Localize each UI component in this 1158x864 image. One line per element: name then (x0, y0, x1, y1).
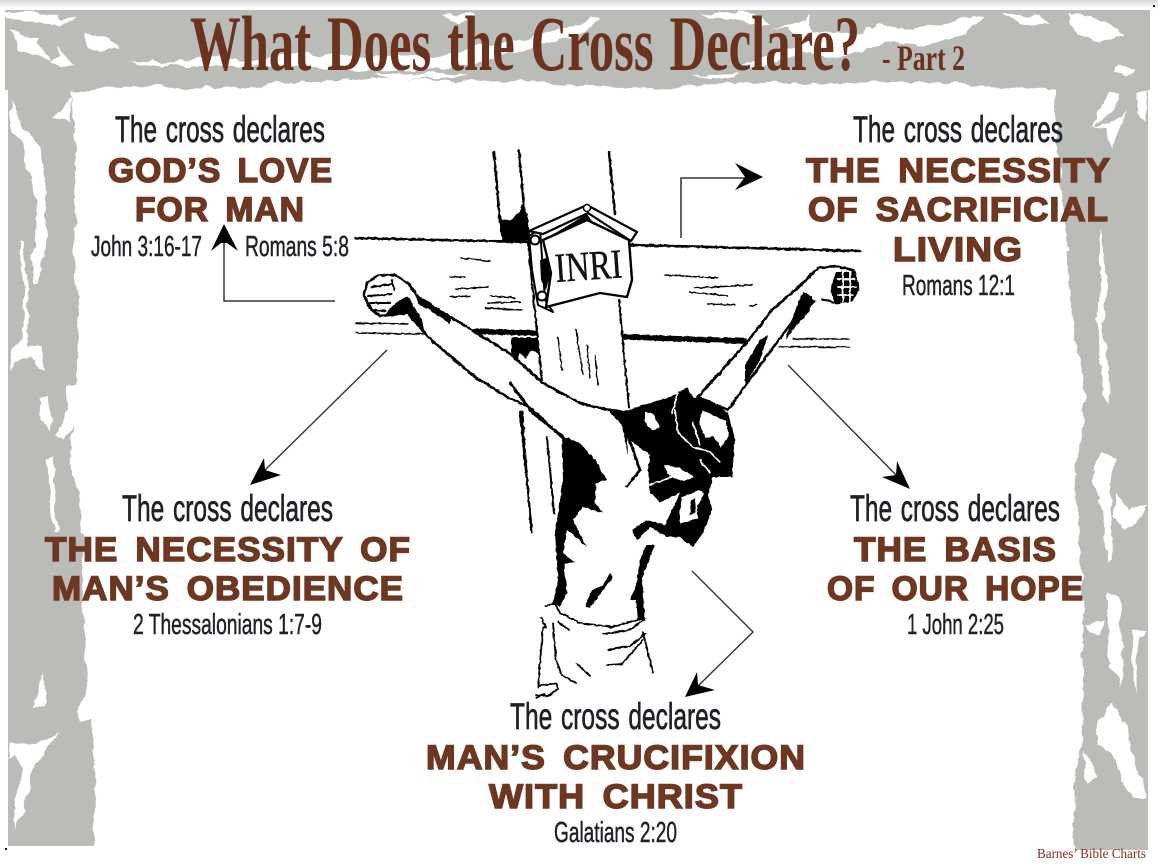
text block: necessity of man's obedience: MAN’S OBEDIENCE (52, 570, 404, 608)
right band cracks (1084, 92, 1146, 798)
text block: necessity of sacrificial living: LIVING (893, 231, 1023, 269)
text block: God's love for man: FOR MAN (135, 191, 305, 229)
figure: torso (553, 436, 665, 627)
text block: man's crucifixion with Christ: MAN’S CRUCIFIXION (426, 739, 806, 777)
cross beams (356, 150, 860, 532)
text block: necessity of sacrificial living (806, 109, 1111, 302)
text block: necessity of sacrificial living: OF SACRIFICIAL (808, 191, 1109, 229)
arrow: to man's obedience (250, 350, 387, 485)
text block: necessity of sacrificial living: THE NECESSITY (806, 152, 1111, 190)
figure: loincloth (536, 603, 653, 698)
left band cracks (8, 98, 92, 830)
text block: necessity of man's obedience: THE NECESSITY OF (45, 531, 411, 569)
text block: God's love for man: GOD’S LOVE (108, 152, 333, 190)
title sign: INRI (529, 204, 637, 312)
text block: man's crucifixion with Christ (426, 696, 806, 849)
text block: basis of our hope (827, 488, 1084, 641)
sign text: INRI (553, 241, 624, 292)
arrow: to crucifixion with Christ (685, 571, 753, 697)
arrow: to basis of hope (788, 365, 910, 489)
text block: God's love for man: Romans 5:8 (245, 231, 349, 263)
arrow: to God's love (211, 224, 335, 301)
text block: basis of our hope: 1 John 2:25 (907, 609, 1004, 641)
text block: man's crucifixion with Christ: The cross declares (510, 696, 721, 737)
text block: necessity of man's obedience (45, 488, 411, 641)
text block: basis of our hope: OF OUR HOPE (827, 570, 1084, 608)
illustration: crucifix (356, 150, 860, 698)
figure: head with crown of thorns (606, 388, 735, 547)
credit: Barnes' Bible Charts: Barnes’ Bible Charts (1037, 847, 1146, 862)
text block: necessity of man's obedience: The cross declares (122, 488, 333, 529)
figure: right arm and fist (698, 266, 859, 410)
arrow: to sacrificial living (681, 163, 763, 238)
text block: man's crucifixion with Christ: WITH CHRIST (489, 778, 743, 816)
text block: necessity of sacrificial living: Romans 12:1 (902, 270, 1015, 302)
top band cracks (5, 12, 1136, 80)
text block: necessity of man's obedience: 2 Thessalonians 1:7-9 (133, 609, 322, 641)
text block: basis of our hope: THE BASIS (854, 531, 1057, 569)
text block: man's crucifixion with Christ: Galatians 2:20 (554, 817, 677, 849)
subtitle: part 2: - Part 2 (882, 38, 965, 78)
text block: God's love for man (91, 109, 349, 263)
figure: left arm and fist (364, 275, 640, 520)
text block: God's love for man: The cross declares (115, 109, 325, 150)
text block: God's love for man: John 3:16-17 (91, 231, 202, 263)
